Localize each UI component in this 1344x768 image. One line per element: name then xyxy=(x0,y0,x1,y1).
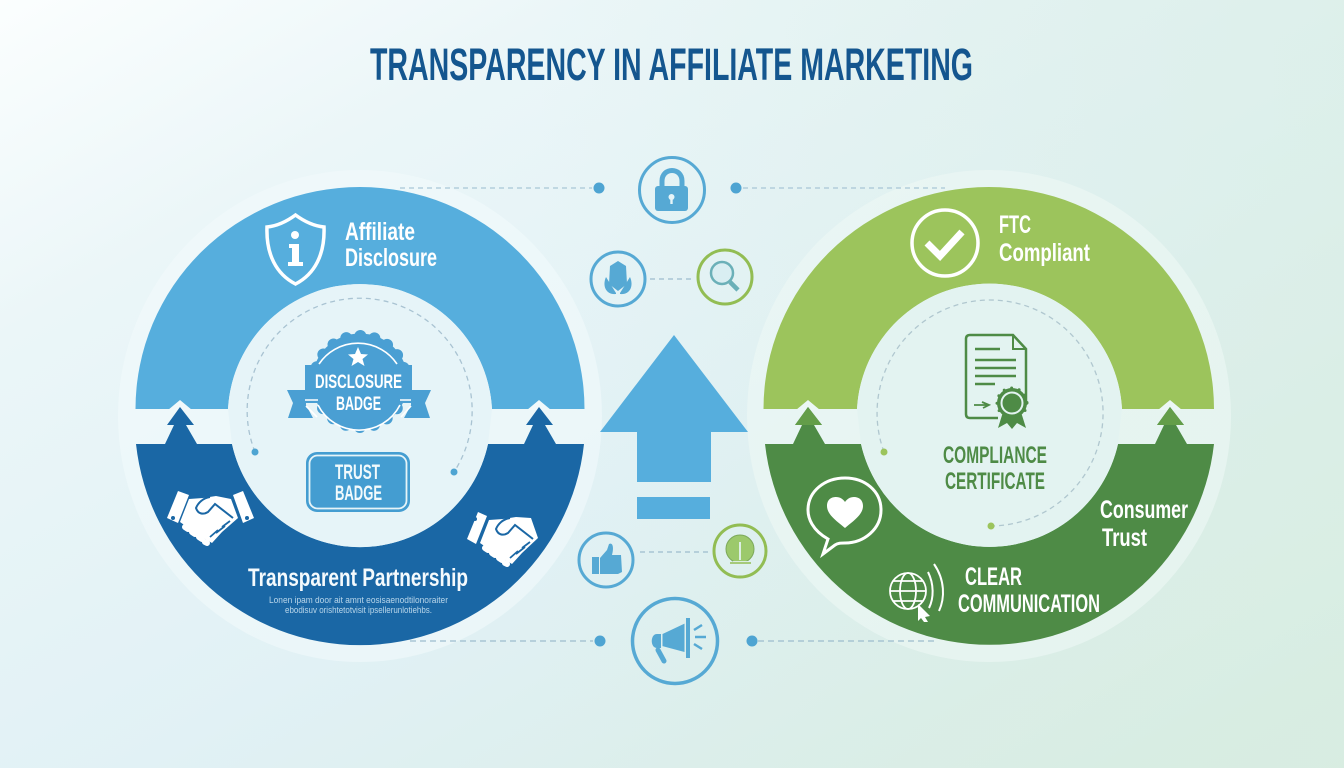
icon: green tree xyxy=(714,525,766,577)
body text: ebodisuv orishtetotvisit ipsellerunlotiehbs. xyxy=(285,605,432,615)
panel: left circle xyxy=(118,170,602,662)
trust badge: BADGE xyxy=(335,482,382,505)
inner circle fill xyxy=(228,284,492,547)
icon: handshake left xyxy=(167,491,254,543)
icon: megaphone xyxy=(632,598,718,684)
up arrow left xyxy=(793,400,825,444)
connector dot: bottom left xyxy=(594,636,606,646)
heading: FTC compliant: FTC xyxy=(999,211,1031,239)
ring dot left xyxy=(880,448,888,456)
title: TRANSPARENCY IN AFFILIATE MARKETING xyxy=(370,39,973,90)
icon: lock xyxy=(640,158,704,222)
label: clear communication: CLEAR xyxy=(965,563,1022,591)
label: compliance certificate xyxy=(943,442,1047,495)
connector dot: top right xyxy=(730,182,742,194)
label: clear communication xyxy=(958,563,1100,618)
panel: right circle xyxy=(747,170,1231,662)
label: consumer trust xyxy=(1100,496,1188,552)
up arrow right xyxy=(1155,400,1187,444)
heading: transparent partnership: Transparent Partnership xyxy=(248,564,468,592)
heading: affiliate disclosure: Affiliate xyxy=(345,218,415,246)
dashed ring xyxy=(247,298,472,472)
lower band: consumer trust xyxy=(765,444,1214,645)
upper band: FTC compliant xyxy=(764,187,1214,409)
icon: shield leaf xyxy=(591,252,645,306)
outer halo ring xyxy=(118,170,602,662)
label: clear communication: COMMUNICATION xyxy=(958,590,1100,618)
upper band: affiliate disclosure xyxy=(136,187,584,409)
connector: bottom left dashes xyxy=(410,640,593,642)
center big arrow xyxy=(600,335,748,519)
icon: check circle xyxy=(912,210,978,276)
icon: magnifier xyxy=(698,250,752,304)
icon: info shield xyxy=(267,215,324,284)
ring dot bottom xyxy=(988,522,994,530)
body text: Lonen ipam door ait amnt eosisaenodtilonoraiter xyxy=(269,595,448,605)
label: compliance certificate: CERTIFICATE xyxy=(945,468,1045,495)
icon: heart speech bubble xyxy=(808,478,881,554)
heading: FTC compliant: Compliant xyxy=(999,239,1091,267)
icon: thumbs up xyxy=(579,533,633,587)
up arrow left xyxy=(165,400,197,444)
connector: upper middle dashes xyxy=(650,278,692,280)
heading: affiliate disclosure xyxy=(345,218,437,272)
label: consumer trust: Consumer xyxy=(1100,496,1188,524)
connector: bottom right dashes xyxy=(758,640,935,642)
outer halo ring xyxy=(747,170,1231,662)
label: compliance certificate: COMPLIANCE xyxy=(943,442,1047,469)
ring dot right xyxy=(450,468,458,476)
connector dot: top left xyxy=(594,182,604,194)
disclosure badge: DISCLOSURE xyxy=(315,371,402,393)
icon: compliance certificate xyxy=(966,335,1027,429)
connector dot: bottom right xyxy=(746,636,758,646)
heading: affiliate disclosure: Disclosure xyxy=(345,244,437,272)
up arrow right xyxy=(524,400,556,444)
disclosure badge xyxy=(287,334,431,430)
body text xyxy=(269,595,448,615)
icon: handshake right xyxy=(467,512,538,564)
lower band: transparent partnership xyxy=(136,444,584,645)
label: consumer trust: Trust xyxy=(1102,524,1147,552)
trust badge: TRUST xyxy=(335,461,380,484)
connector: lower middle dashes xyxy=(640,551,710,553)
inner circle fill xyxy=(857,284,1122,547)
heading: FTC compliant xyxy=(999,211,1091,267)
connector: top left dashes xyxy=(400,187,592,189)
connector: top right dashes xyxy=(743,187,945,189)
trust badge xyxy=(306,452,410,512)
ring dot left xyxy=(252,448,258,456)
icon: globe with cursor xyxy=(890,564,943,622)
disclosure badge: BADGE xyxy=(336,393,381,415)
dashed ring xyxy=(877,300,1103,526)
